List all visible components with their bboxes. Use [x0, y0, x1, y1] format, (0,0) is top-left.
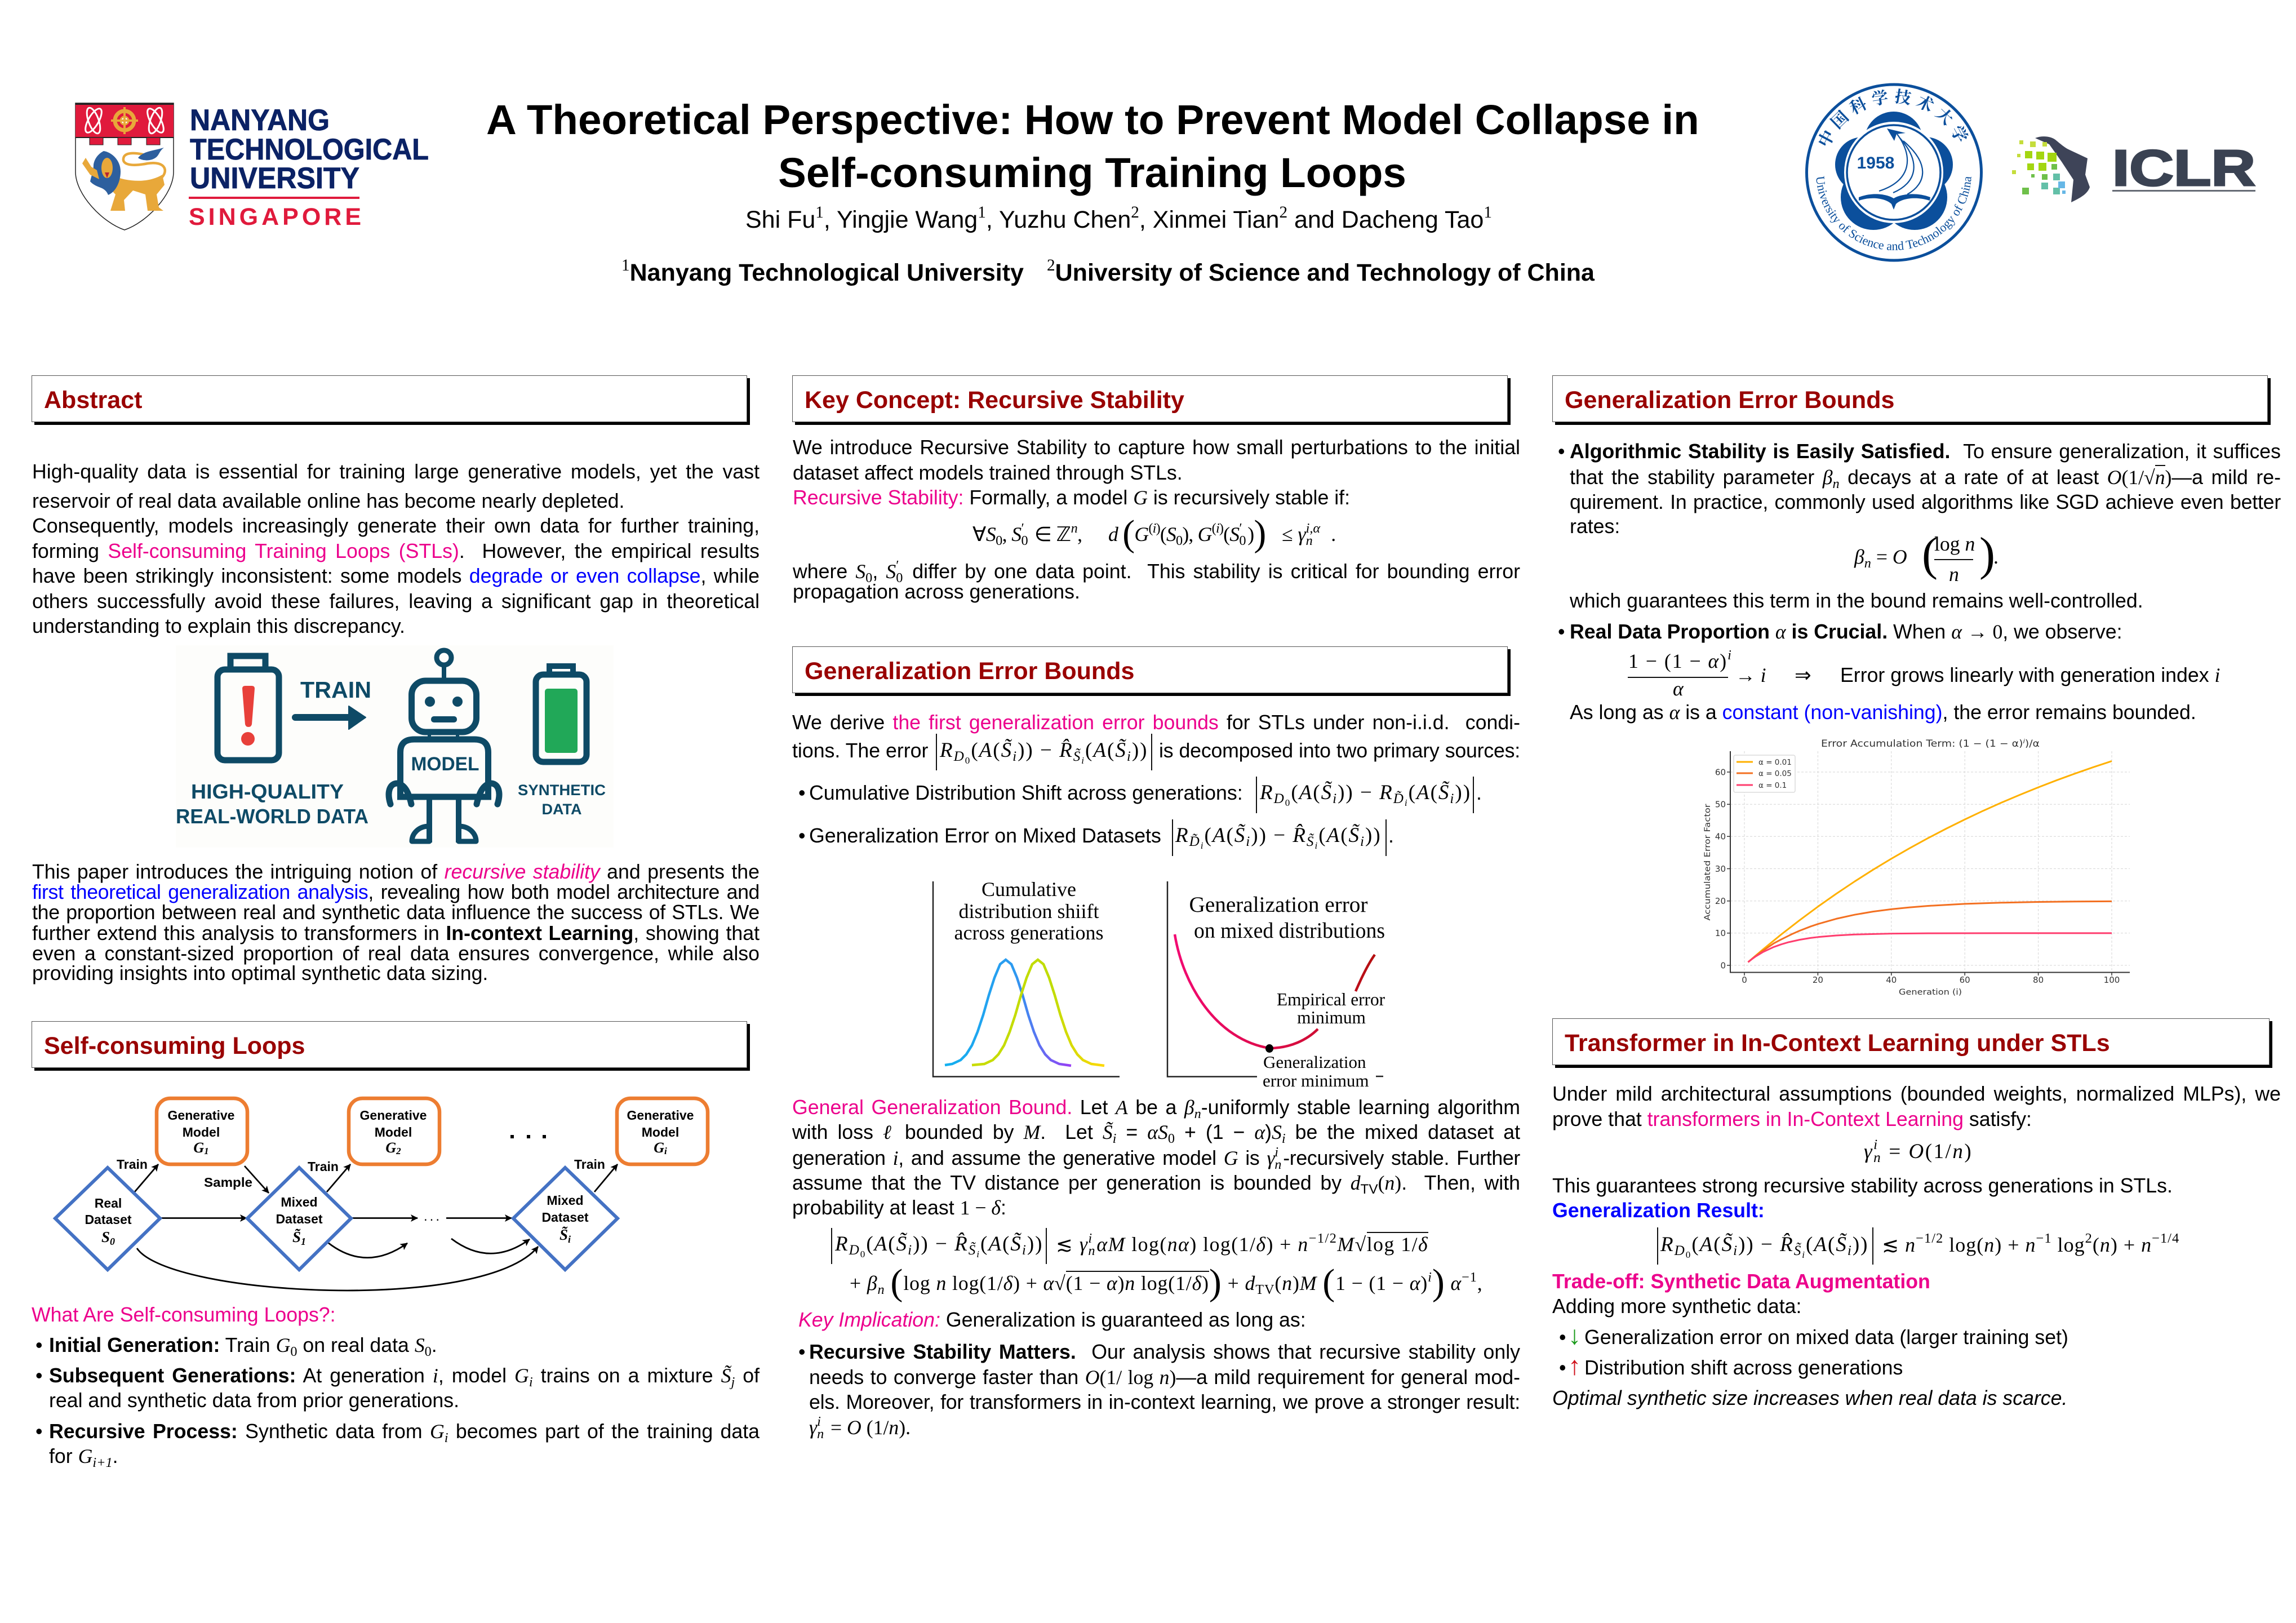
text block: abstract contribution [32, 861, 760, 985]
heading: generalization error bounds [792, 646, 1508, 693]
label: synthetic data: SYNTHETIC [518, 782, 606, 799]
formula: stability rate: ) [1979, 528, 1995, 580]
heading: transformer under STLs [1552, 1018, 2270, 1065]
edge labels: Train [117, 1157, 148, 1172]
node: generative model i: G [654, 1139, 664, 1156]
subheading: generalization result: Generalization Result: [1552, 1199, 1765, 1222]
grid [1730, 751, 2130, 972]
formula: recursive stability definition: 0 [1239, 533, 1246, 548]
callout: key implication: Key Implication: Generalization is guaranteed as long as: [798, 1309, 1306, 1331]
formula: stability rate: n [1949, 563, 1959, 586]
list: trade-off effects: • [1559, 1326, 1566, 1349]
logo: ICLR [2012, 136, 2256, 202]
edge labels: Train [574, 1157, 605, 1172]
list: recursive stability matters: els. Moreover, for transformers in in-context learning, we prove a stronger result: [809, 1391, 1520, 1413]
text block: recursive stability introduction [793, 435, 1520, 511]
icon: synthetic data battery [536, 666, 587, 762]
axes: 20 [1715, 896, 1726, 906]
formula: recursive stability definition: n [1306, 533, 1313, 548]
node: mixed dataset i: S̃ [559, 1226, 568, 1243]
text block: recursive stability introduction: We introduce Recursive Stability to capture how small perturbations to the initial [793, 436, 1520, 459]
formula: gamma rate: n [1873, 1150, 1882, 1165]
chart: generalization error curve: Generalization error [1189, 893, 1368, 917]
list item: algorithmic stability [1561, 439, 2281, 540]
axes: 0 [1720, 960, 1726, 970]
list: loop steps: Initial Generation: Train G0 on real data S0. [49, 1334, 437, 1359]
text block: assumptions: Under mild architectural assumptions (bounded weights, normalized MLPs), we [1552, 1083, 2281, 1105]
axes: Generation (i) [1899, 988, 1962, 997]
node: generative model 2 [349, 1098, 439, 1164]
text: guarantees: This guarantees strong recursive stability across generations in STLs. [1552, 1174, 2173, 1197]
title: A Theoretical Perspective: How to Prevent Model Collapse in [486, 96, 1699, 143]
heading: self-consuming loops: Self-consuming Loops [44, 1032, 305, 1059]
formula: recursive stability definition: i,α [1306, 521, 1320, 536]
axes: 80 [2033, 975, 2044, 985]
list: loop steps: • [35, 1364, 43, 1387]
list item: real data proportion: • [1558, 620, 1565, 643]
wordmark: ICLR [2112, 140, 2255, 197]
text block: error decomposition: . [1388, 824, 1394, 847]
formula: generalization bound: + βn (log n log(1/δ) + α√(1 − α)n log(1/δ)) + dTV(n)M (1 − (1 − α)i) α−1, [850, 1262, 1483, 1303]
text block: recursive stability note: propagation across generations. [793, 580, 1080, 603]
flow arrows [135, 1164, 618, 1291]
label: synthetic data [518, 782, 606, 818]
label: high-quality real-world data [176, 780, 368, 828]
axes: 30 [1715, 864, 1726, 874]
axes: 50 [1715, 799, 1726, 809]
chart: generalization error curve: minimum [1297, 1008, 1366, 1027]
formula: gamma rate: γ = O(1/n) [1864, 1140, 1973, 1163]
text block: general generalization bound: General Generalization Bound. Let A be a βn-uniformly stable learning algorithm [792, 1096, 1520, 1121]
formula: recursive stability definition: ∀S0, S ∈ ℤn, [972, 521, 1082, 548]
formula: stability rate: . [1993, 546, 1999, 568]
list item: algorithmic stability: quirement. In practice, commonly used algorithms like SGD achieve even better [1570, 491, 2281, 513]
edge labels: Train [308, 1159, 339, 1174]
node: real dataset [55, 1168, 160, 1270]
axes: 40 [1886, 975, 1897, 985]
axes: 20 [1813, 975, 1823, 985]
legend [1734, 755, 1795, 792]
text block: recursive stability introduction: dataset affect models trained through STLs. [793, 462, 1183, 484]
formula: linear growth: α [1673, 677, 1684, 700]
text block: general generalization bound: i [1274, 1145, 1278, 1160]
text block: recursive stability note [793, 559, 1520, 604]
wordmark: SINGAPORE [189, 203, 361, 230]
text block: recursive stability introduction: Recursive Stability: Formally, a model G is recursively stable if: [793, 486, 1350, 509]
text block: error decomposition [792, 710, 1520, 857]
node: real dataset: 0 [110, 1236, 115, 1247]
formula: recursive stability definition: ′ [1239, 521, 1242, 536]
formula: transformer generalization result: ≲ n−1/2 log(n) + n−1 log2(n) + n−1/4 [1882, 1231, 2179, 1256]
formula: stability rate [1854, 533, 2001, 589]
text block: error decomposition: tions. The error [792, 739, 928, 762]
chart: generalization error curve: error minimum [1263, 1071, 1369, 1090]
affiliations [621, 256, 1595, 286]
formula: linear growth: ⇒ [1795, 664, 1811, 686]
affiliations: 2University of Science and Technology of China [1047, 256, 1595, 286]
arrow: train: TRAIN [300, 677, 371, 703]
chart: cumulative distribution shift: distribution shiift [958, 900, 1099, 923]
node: real dataset: Dataset [85, 1212, 132, 1227]
text: adding synthetic data: Adding more synthetic data: [1552, 1295, 1801, 1318]
axes: 60 [1715, 768, 1726, 778]
node: generative model i [617, 1098, 708, 1164]
node: mixed dataset i: Mixed [547, 1193, 584, 1208]
node: mixed dataset 1: Dataset [276, 1212, 323, 1226]
heading: abstract: Abstract [44, 387, 142, 414]
formula: generalization bound: ≲ γ αM log(nα) log(1/δ) + n−1/2M√log 1/δ [1056, 1231, 1428, 1256]
formula: recursive stability definition: 0 [1022, 533, 1028, 548]
node: generative model 1: Model [183, 1125, 220, 1139]
text block: abstract introduction: understanding to explain this discrepancy. [32, 615, 405, 637]
figure: distribution shift and generalization error [930, 879, 1392, 1096]
node: generative model 2: Generative [360, 1108, 427, 1123]
node: mixed dataset i [513, 1168, 618, 1270]
wordmark: UNIVERSITY [190, 162, 359, 195]
legend: α = 0.1 [1758, 781, 1787, 790]
node: mixed dataset 1 [247, 1168, 351, 1270]
shield [76, 103, 174, 230]
subheading: trade-off: Trade-off: Synthetic Data Augmentation [1552, 1270, 1930, 1293]
formula: linear growth [1628, 648, 2225, 699]
text block: error decomposition: • [798, 782, 806, 804]
text block: general generalization bound: n [1274, 1157, 1281, 1172]
text block: abstract introduction: High-quality data is essential for training large generative models, yet the vast [32, 460, 760, 483]
list item: algorithmic stability: • [1558, 440, 1565, 463]
text block: abstract introduction: Consequently, models increasingly generate their own data for further training, [32, 515, 760, 537]
list: recursive stability matters: Recursive Stability Matters. Our analysis shows that recursive stability only [809, 1341, 1520, 1363]
affiliations: 1Nanyang Technological University [621, 256, 1024, 286]
panel: key concept recursive stability [792, 375, 1520, 606]
text block: error decomposition: RD̃i(A(S̃i)) − R̂S̃i(A(S̃i)) [1175, 824, 1382, 851]
formula: recursive stability definition: ′ [1022, 521, 1024, 536]
formula: generalization bound: i [1088, 1231, 1093, 1246]
heading: generalization error bounds [1552, 375, 2268, 422]
ellipsis [510, 1135, 546, 1138]
text: well-controlled: which guarantees this term in the bound remains well-controlled. [1570, 589, 2143, 612]
node: generative model 1: G [193, 1139, 204, 1156]
node: mixed dataset 1: Mixed [281, 1195, 318, 1209]
formula: transformer generalization result: RD0(A(S̃i)) − R̂S̃i(A(S̃i)) [1660, 1233, 1868, 1260]
panel: generalization error bounds right [1552, 375, 2281, 1003]
text block: abstract contribution: the proportion between real and synthetic data influence the success of STLs. We [32, 901, 760, 924]
heading: abstract [32, 375, 747, 422]
label: high-quality real-world data: REAL-WORLD DATA [176, 805, 368, 828]
figure: real data trains model producing synthetic data [176, 648, 606, 844]
list: loop steps: for Gi+1. [49, 1445, 118, 1470]
heading: key concept [792, 375, 1508, 422]
diagram: self-consuming loop flow [51, 1093, 716, 1291]
text block: error decomposition: . [1476, 782, 1482, 804]
list item: algorithmic stability: that the stability parameter βn decays at a rate of at least O(1/√n)—a mild re- [1570, 466, 2281, 491]
arrow: train [295, 677, 371, 729]
list: loop steps: Recursive Process: Synthetic data from Gi becomes part of the training data [49, 1420, 760, 1445]
formula: recursive stability definition: ≤ γ . [1282, 523, 1336, 546]
legend: α = 0.01 [1758, 758, 1792, 767]
text block: error decomposition: Generalization Error on Mixed Datasets [809, 824, 1161, 847]
icon: robot model [389, 650, 499, 842]
data pixels [2012, 140, 2066, 194]
logo: University of Science and Technology of China [1805, 83, 1983, 261]
edge labels: ... [424, 1209, 442, 1224]
formula: generalization bound: n [1088, 1243, 1096, 1258]
chart title: )/α [2025, 738, 2040, 750]
chart: generalization error curve [1167, 881, 1385, 1090]
list: recursive stability matters: needs to converge faster than O(1/ log n)—a mild requirement for general mod- [809, 1366, 1520, 1389]
panel: self-consuming loops [32, 1021, 760, 1472]
chart: generalization error curve: on mixed distributions [1194, 919, 1385, 943]
title [486, 96, 1699, 196]
text block: error decomposition: • [798, 824, 806, 847]
text block: abstract contribution: even a constant-sized proportion of real data ensures convergence, while also [32, 942, 760, 965]
node: mixed dataset 1: S̃ [292, 1229, 301, 1245]
list: loop steps [39, 1333, 760, 1469]
heading: generalization error bounds: Generalization Error Bounds [1565, 387, 1894, 414]
formula: stability rate: ( [1922, 528, 1938, 580]
chart: cumulative distribution shift [933, 878, 1120, 1076]
text block: abstract contribution: first theoretical generalization analysis, revealing how both model architecture and [32, 881, 760, 903]
subheading: what are self-consuming loops: What Are Self-consuming Loops?: [32, 1303, 336, 1326]
heading: transformer under STLs: Transformer in In-Context Learning under STLs [1565, 1030, 2110, 1057]
wordmark: TECHNOLOGICAL [190, 133, 429, 166]
text block: error decomposition: is decomposed into two primary sources: [1159, 739, 1520, 762]
chart: cumulative distribution shift: across generations [954, 921, 1103, 944]
node: generative model 1: 1 [204, 1146, 209, 1156]
text block: general generalization bound: probability at least 1 − δ: [792, 1196, 1006, 1219]
text block: error decomposition: RD0(A(S̃i)) − RD̃i(A(S̃i)) [1260, 781, 1471, 808]
logo: University of Science and Technology of China: 1958 [1857, 154, 1894, 172]
formula: stability rate: βn = O [1854, 546, 1907, 571]
text: constant alpha: As long as α is a constant (non-vanishing), the error remains bounded. [1570, 701, 2196, 724]
heading: generalization error bounds: Generalization Error Bounds [805, 658, 1134, 685]
text block: abstract introduction: forming Self-consuming Training Loops (STLs). However, the empirical results [32, 540, 760, 562]
list item: real data proportion: Real Data Proportion α is Crucial. When α → 0, we observe: [1570, 620, 2122, 643]
node: real dataset: Real [95, 1196, 122, 1210]
list: loop steps: real and synthetic data from prior generations. [49, 1389, 459, 1412]
text block: recursive stability note: ′ [896, 558, 899, 573]
formula: linear growth: 1 − (1 − α)i [1628, 648, 1733, 672]
formula: recursive stability definition [972, 522, 1339, 547]
text block: abstract introduction [32, 460, 760, 637]
node: generative model 2: G [385, 1139, 396, 1156]
logo: University of Science and Technology of China: 中国科学技术大学 [1818, 88, 1969, 145]
formula: generalization bound: RD0(A(S̃i)) − R̂S̃i(A(S̃i)) [835, 1232, 1043, 1260]
node: mixed dataset 1: 1 [301, 1236, 306, 1247]
list: recursive stability matters: i [817, 1414, 821, 1429]
node: mixed dataset i: Dataset [541, 1210, 589, 1225]
logo: Nanyang Technological University [75, 103, 429, 230]
axes: Accumulated Error Factor [1703, 804, 1712, 921]
list: recursive stability matters: n [817, 1426, 824, 1442]
chart: cumulative distribution shift: Cumulative [982, 878, 1076, 901]
formula: linear growth: → i [1735, 664, 1766, 686]
node: generative model 1 [157, 1098, 247, 1164]
node: mixed dataset i: i [568, 1234, 571, 1245]
text block: abstract introduction: others successfully avoid these failures, leaving a significant gap in theoretical [32, 590, 760, 613]
authors: Shi Fu1, Yingjie Wang1, Yuzhu Chen2, Xinmei Tian2 and Dacheng Tao1 [745, 203, 1492, 233]
icon: real data battery with warning [217, 656, 279, 760]
axes: 40 [1715, 832, 1726, 842]
list: trade-off effects: Generalization error on mixed data (larger training set) [1584, 1326, 2068, 1349]
axes: 10 [1715, 928, 1726, 938]
text block: abstract introduction: have been strikingly inconsistent: some models degrade or even collapse, while [32, 565, 760, 587]
chart title: Error Accumulation Term: (1 − (1 − α) [1821, 738, 2003, 750]
list: recursive stability matters: • [798, 1341, 806, 1363]
formula: linear growth: Error grows linearly with generation index i [1840, 664, 2220, 686]
list: trade-off effects: • [1559, 1356, 1566, 1379]
node: generative model i: Generative [627, 1108, 694, 1123]
text block: abstract contribution: This paper introduces the intriguing notion of recursive stability and presents the [32, 861, 760, 883]
node: generative model 2: 2 [396, 1146, 401, 1156]
list: loop steps: • [35, 1420, 43, 1443]
logo: University of Science and Technology of China: University of Science and Technology of China [1817, 176, 1971, 250]
title: Self-consuming Training Loops [778, 149, 1406, 196]
list item: algorithmic stability: Algorithmic Stability is Easily Satisfied. To ensure generalization, it suffices [1570, 440, 2281, 463]
list: trade-off effects [1562, 1325, 2069, 1380]
panel: transformer in in-context learning [1552, 1018, 2281, 1413]
list: recursive stability matters: γ = O (1/n). [809, 1416, 911, 1439]
list: loop steps: Subsequent Generations: At generation i, model Gi trains on a mixture S̃j of [49, 1364, 760, 1390]
text block: error decomposition: RD0(A(S̃i)) − R̂S̃i(A(S̃i)) [940, 739, 1148, 766]
node: generative model i: Model [642, 1125, 679, 1139]
list: loop steps: • [35, 1334, 43, 1356]
text block: abstract introduction: reservoir of real data available online has become nearly depleted. [32, 490, 624, 512]
text block: assumptions: prove that transformers in In-Context Learning satisfy: [1552, 1108, 2032, 1130]
head silhouette [2035, 136, 2090, 202]
text block: error decomposition: Cumulative Distribution Shift across generations: [809, 782, 1243, 804]
formula: transformer generalization result [1657, 1227, 2181, 1265]
node: real dataset: S [101, 1229, 110, 1245]
text block: assumptions [1552, 1081, 2281, 1132]
text block: abstract contribution: providing insights into optimal synthetic data sizing. [32, 962, 488, 985]
list: trade-off effects: Distribution shift across generations [1584, 1356, 1903, 1379]
list item: algorithmic stability: rates: [1570, 515, 1620, 538]
text block: general generalization bound: assume that the TV distance per generation is bounded by dTV(n). Then, with [792, 1172, 1520, 1197]
text block: general generalization bound: with loss ℓ bounded by M. Let S̃i = αS0 + (1 − α)Si be the mixed dataset at [792, 1121, 1520, 1146]
axes: 0 [1742, 975, 1747, 985]
chart: error accumulation term [1690, 733, 2141, 1003]
panel: generalization error bounds centre [792, 646, 1520, 1447]
text block: abstract contribution: further extend this analysis to transformers in In-context Learning, showing that [32, 922, 760, 944]
formula: recursive stability definition: d (G(i)(S0), G(i)(S )) [1108, 513, 1266, 554]
panel: abstract [32, 375, 760, 985]
callout: optimal synthetic size: Optimal synthetic size increases when real data is scarce. [1552, 1387, 2067, 1409]
wordmark [189, 104, 429, 230]
formula: stability rate: log n [1934, 533, 1975, 555]
formula: gamma rate: i [1873, 1137, 1879, 1152]
label: synthetic data: DATA [542, 801, 581, 818]
axes: 100 [2104, 975, 2120, 985]
list item: real data proportion [1561, 619, 2281, 644]
node: generative model 2: Model [375, 1125, 412, 1139]
text block: recursive stability note: 0 [896, 570, 903, 586]
node: generative model 1: Generative [168, 1108, 234, 1123]
text block: error decomposition: We derive the first generalization error bounds for STLs under non-i.i.d. condi- [792, 711, 1520, 734]
legend: α = 0.05 [1758, 769, 1792, 778]
icon: robot model: MODEL [411, 753, 479, 775]
heading: self-consuming loops [32, 1021, 747, 1068]
text block: general generalization bound [792, 1095, 1520, 1220]
list: trade-off effects: ↓ [1568, 1321, 1581, 1350]
edge labels: Sample [204, 1175, 252, 1190]
formula: generalization bound [831, 1228, 1490, 1296]
wordmark: NANYANG [190, 104, 330, 137]
edge labels [117, 1157, 605, 1224]
text block: general generalization bound: generation i, and assume the generative model G is γ -recursively stable. Further [792, 1147, 1520, 1169]
axes [1703, 751, 2130, 997]
chart title: i [2023, 738, 2025, 745]
curves [1748, 761, 2112, 962]
text block: recursive stability note: where S0, S differ by one data point. This stability is critical for bounding error [793, 560, 1520, 586]
node: generative model i: i [664, 1146, 667, 1156]
chart: generalization error curve: Empirical error [1277, 990, 1385, 1009]
list: trade-off effects: ↑ [1568, 1351, 1581, 1380]
list: recursive stability matters [802, 1340, 1520, 1441]
label: high-quality real-world data: HIGH-QUALITY [191, 780, 344, 803]
axes: 60 [1960, 975, 1970, 985]
chart: generalization error curve: Generalization [1263, 1052, 1366, 1072]
heading: key concept: Key Concept: Recursive Stability [805, 387, 1184, 414]
